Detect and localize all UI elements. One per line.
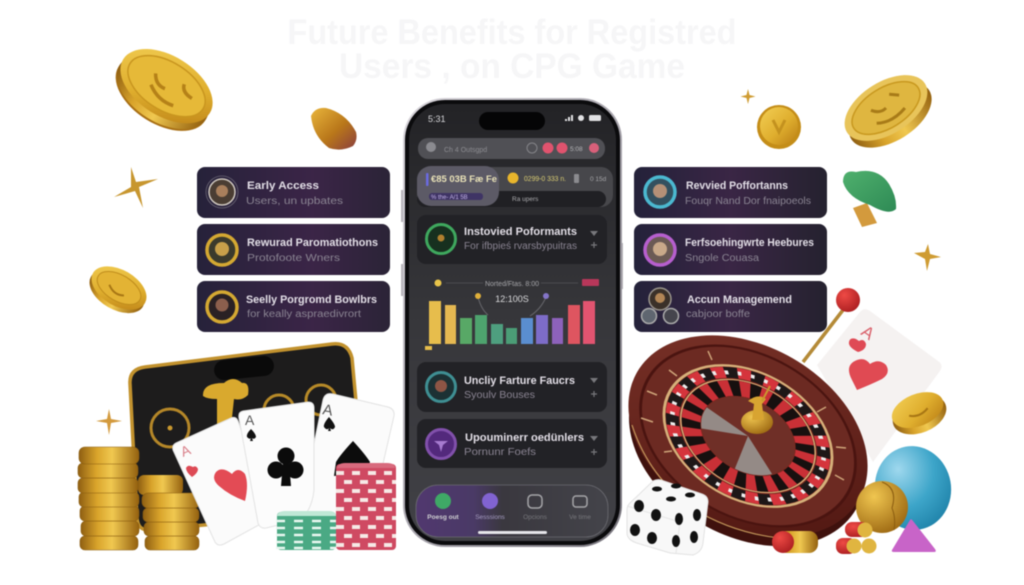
status row: Ra upers — [512, 196, 539, 203]
card: bowlers: Seelly Porgromd Bowlbrs — [246, 294, 377, 306]
icon: round gold coin — [757, 105, 801, 149]
illustration: green poker chips — [276, 511, 336, 550]
card: account management: cabjoor boffe — [686, 309, 750, 320]
illustration: lever with red ball — [803, 288, 860, 362]
card: upcoming: Pornunr Foefs — [464, 447, 536, 458]
status bar — [428, 114, 601, 124]
illustration: red and gold cylinders — [772, 522, 876, 554]
illustration: ace of hearts behind roulette: A — [858, 322, 878, 344]
card: upcoming — [417, 419, 607, 468]
card: revvied performance — [634, 167, 827, 218]
rim markers — [641, 351, 846, 480]
tab: play: Poesg out — [427, 514, 460, 521]
tab: play — [427, 493, 460, 521]
small cylinder pile — [836, 522, 876, 554]
left stack — [78, 447, 139, 550]
long cylinder — [772, 531, 818, 553]
illustration: star sparkle bottom left — [96, 409, 122, 435]
icon: gold nugget — [311, 108, 357, 150]
icon: small sparkle top — [740, 89, 756, 104]
illustration: red poker chips — [336, 463, 396, 550]
bar chart — [425, 279, 599, 350]
bar chart: 12:100S — [495, 294, 529, 304]
bar chart: Norted/Ftas. 8:00 — [485, 281, 539, 288]
wheel base — [593, 305, 901, 585]
search bar — [418, 138, 605, 159]
tab: options: Opcions — [523, 514, 548, 521]
card: ace of clubs — [239, 402, 314, 528]
status row: 0 15d — [590, 176, 607, 183]
card: unique feature: Syoulv Bouses — [464, 390, 535, 401]
illustration: gold coin stacks — [78, 447, 200, 550]
bowl — [687, 381, 809, 491]
search bar: Ch 4 Outsgpd — [444, 147, 487, 154]
status bar: 5:31 — [428, 114, 446, 124]
card: early access: Early Access — [247, 180, 319, 192]
card: features: Ferfsoehingwrte Heebures — [685, 237, 814, 249]
number ring — [639, 336, 857, 536]
card: ace of hearts — [173, 417, 270, 545]
card: improved performance: For ifbpieś rvarsbypuitras — [464, 241, 577, 252]
home indicator — [478, 531, 547, 534]
phone mockup — [401, 98, 623, 547]
tab: sessions: Sesssions — [475, 514, 506, 521]
icon: large gold coin top right — [833, 62, 943, 161]
card: features: Sngole Couasa — [685, 253, 759, 264]
illustration: coin on card — [886, 385, 952, 442]
gold rim line — [632, 425, 792, 539]
card: account management: Accun Managemend — [687, 294, 792, 306]
card: ace of spades back: A — [321, 401, 334, 420]
icon: sparkle right — [914, 244, 941, 271]
tab: wallet: Ve time — [569, 514, 591, 521]
status row — [417, 166, 613, 207]
icon: large gold coin top left — [103, 34, 226, 146]
illustration: white dice — [627, 480, 708, 555]
illustration: roulette wheel — [592, 294, 904, 585]
card: unique feature — [417, 362, 607, 412]
card: revvied performance: Fouqr Nand Dor fnaipoeols — [685, 196, 811, 207]
card: ace of hearts: A — [178, 441, 193, 460]
title: Future Benefits for Registred — [288, 13, 736, 52]
icon: green mushroom — [843, 171, 896, 227]
back stack — [138, 475, 183, 495]
status row: €85 03B Fæ Fe — [431, 174, 497, 184]
illustration: ace of hearts behind roulette — [817, 309, 942, 462]
tab: sessions — [475, 493, 506, 521]
title — [288, 13, 736, 86]
illustration: blue egg — [868, 440, 958, 536]
panel: left benefit cards — [197, 167, 390, 332]
status row: 0299-0 333 n. — [524, 176, 566, 183]
phone body — [403, 98, 622, 547]
card: rewards: Protofoote Wners — [247, 253, 340, 264]
card: account management — [634, 281, 827, 332]
card: early access — [197, 167, 390, 218]
card: bowlers — [197, 281, 390, 332]
card: early access: Users, un upbates — [246, 196, 343, 207]
illustration: gold ball — [856, 481, 908, 533]
status row: % the- A/1 5B — [431, 195, 468, 201]
search bar: 5:08 — [570, 146, 583, 153]
card: bowlers: for keally aspraedivrort — [247, 309, 361, 320]
phone side buttons — [401, 190, 623, 296]
dynamic island — [479, 112, 545, 130]
gold spinner — [741, 386, 773, 434]
tab bar — [416, 485, 608, 537]
card: rewards: Rewurad Paromatiothons — [247, 237, 378, 249]
pocket ring — [674, 369, 822, 503]
wheel rim — [592, 294, 904, 578]
card: unique feature: Uncliy Farture Faucrs — [464, 375, 575, 387]
tab: wallet — [569, 496, 591, 521]
card: features — [634, 224, 827, 275]
card: improved performance: Instovied Poformants — [464, 226, 577, 238]
card: ace of spades back — [300, 394, 394, 525]
illustration: playing cards fan — [173, 394, 394, 545]
card: ace of clubs: A — [245, 412, 255, 428]
panel: right benefit cards — [634, 167, 827, 332]
card: upcoming: Upouminerr oedünlers — [465, 432, 584, 444]
card: rewards — [197, 224, 390, 275]
illustration: tilted gold phone — [130, 344, 366, 530]
right stack — [142, 493, 200, 550]
title: Users , on CPG Game — [339, 47, 685, 86]
tab: options — [523, 495, 548, 521]
icon: small gold coin left — [82, 257, 154, 322]
card: revvied performance: Revvied Poffortanns — [686, 180, 788, 192]
illustration: pink triangle — [892, 519, 936, 552]
card: improved performance — [417, 215, 607, 264]
icon: gold sparkle left — [114, 167, 158, 208]
